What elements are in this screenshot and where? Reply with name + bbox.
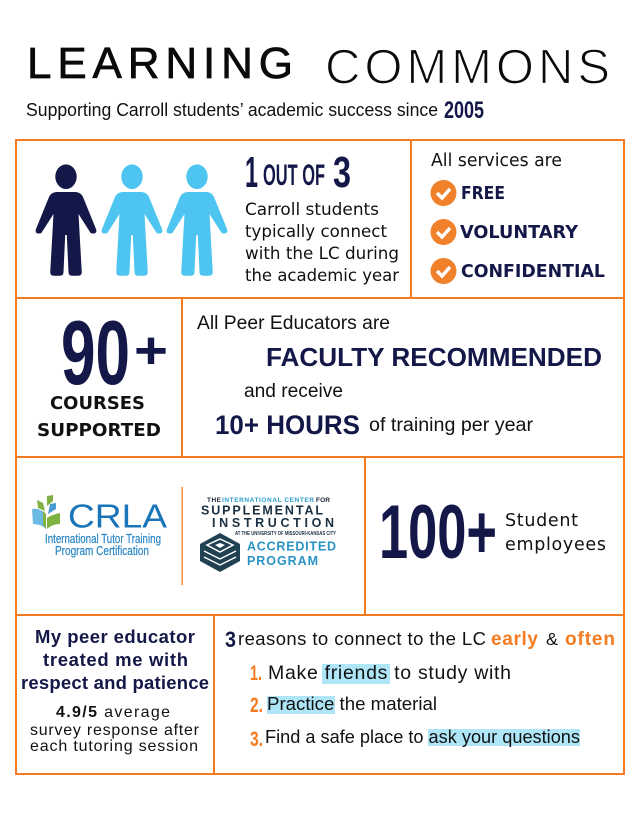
logo caption: international tutor training: International Tutor Training xyxy=(45,532,161,546)
title: COMMONS xyxy=(325,40,610,94)
logo wordmark: CRLA: CRLA xyxy=(68,498,167,534)
panel grid frame xyxy=(16,140,624,774)
icon: CRLA open book xyxy=(32,495,60,529)
heading: 3 reasons: 3 xyxy=(225,627,236,652)
panel: 1 out of 3 students xyxy=(36,148,399,286)
logo text: university line: AT THE UNIVERSITY OF MISSOURI-KANSAS CITY xyxy=(235,531,336,537)
panel: accreditation logos xyxy=(32,487,336,585)
quote: treated me with xyxy=(43,649,188,670)
logo text: accredited program: ACCREDITED xyxy=(247,540,336,554)
panel: peer educators xyxy=(197,313,602,440)
panel: three reasons xyxy=(225,627,615,751)
text: 10+ hours: 10+ HOURS xyxy=(215,410,360,440)
divider xyxy=(182,487,183,585)
stat: 100+: 100+ xyxy=(379,490,497,575)
logo text: supplemental instruction xyxy=(201,504,334,530)
text: faculty recommended: FACULTY RECOMMENDED xyxy=(266,342,602,372)
quote: respect and patience xyxy=(21,672,209,693)
stat: 1 out of 3: 3 xyxy=(333,148,351,197)
label: free: FREE xyxy=(461,183,505,204)
reason 3: 3. xyxy=(250,728,263,751)
panel: courses supported xyxy=(37,303,168,441)
text: all peer educators are: All Peer Educators are xyxy=(197,313,390,334)
text: connection description: the academic year xyxy=(245,266,399,286)
icon: stacked hexagon xyxy=(200,533,240,572)
subtitle: 2005 xyxy=(444,97,484,124)
heading: 3 reasons xyxy=(225,627,615,652)
quote: My peer educator xyxy=(35,626,195,647)
subtitle xyxy=(26,97,484,124)
title xyxy=(27,39,610,94)
icon: check confidential xyxy=(430,258,456,284)
label: courses supported: SUPPORTED xyxy=(37,420,161,441)
label: student employees: employees xyxy=(505,535,606,555)
logo text: supplemental instruction: INSTRUCTION xyxy=(212,516,334,530)
heading: all services are: All services are xyxy=(431,151,562,171)
reason 3: Find a safe place to ask your questions xyxy=(265,726,580,747)
label: student employees xyxy=(505,511,606,555)
label: courses supported xyxy=(37,393,161,441)
reason 2: Practice the material xyxy=(267,693,437,714)
label: courses supported: COURSES xyxy=(50,393,145,414)
stat: 1 out of 3 xyxy=(245,148,351,197)
logo text: international center: INTERNATIONAL CENTER xyxy=(222,497,314,504)
logo: supplemental instruction xyxy=(200,497,336,572)
survey statistic: 4.9/5 average xyxy=(56,704,170,721)
reason 2: 2. xyxy=(250,694,263,717)
reason 1: Make friends to study with xyxy=(268,662,511,684)
logo text: accredited program: PROGRAM xyxy=(247,554,318,568)
label: voluntary: VOLUNTARY xyxy=(460,222,579,243)
logo text: international center: THE xyxy=(207,497,222,504)
icon: dark person xyxy=(36,164,96,276)
panel: services xyxy=(430,151,605,284)
logo caption: international tutor training: Program Certification xyxy=(55,544,149,558)
survey statistic: each tutoring session xyxy=(30,738,198,755)
heading: 3 reasons: early xyxy=(491,629,538,650)
survey statistic xyxy=(30,704,200,755)
logo text: supplemental instruction: SUPPLEMENTAL xyxy=(201,504,323,518)
heading: 3 reasons: & xyxy=(546,629,558,649)
stat: 1 out of 3: 1 xyxy=(245,148,258,197)
subtitle: Supporting Carroll students’ academic success since xyxy=(26,100,438,120)
icon: check voluntary xyxy=(430,219,456,245)
heading: 3 reasons: reasons to connect to the LC xyxy=(238,628,486,649)
icon: light person two xyxy=(167,164,227,276)
icon: check free xyxy=(430,180,456,206)
survey statistic: survey response after xyxy=(30,722,200,739)
icon: light person one xyxy=(102,164,162,276)
logo caption: international tutor training xyxy=(45,532,161,558)
heading: 3 reasons: often xyxy=(565,629,615,650)
text: of training per year: of training per year xyxy=(369,415,534,436)
text: and receive: and receive xyxy=(244,381,343,402)
text: connection description: with the LC during xyxy=(245,244,399,264)
text: connection description xyxy=(245,200,399,286)
stat: 90+: 90 xyxy=(61,303,130,404)
panel: survey quote xyxy=(21,626,209,755)
label: student employees: Student xyxy=(505,511,578,531)
stat: 1 out of 3: OUT OF xyxy=(263,159,325,192)
logo text: international center: FOR xyxy=(316,497,330,504)
quote xyxy=(21,626,209,693)
text: connection description: Carroll students xyxy=(245,200,379,220)
label: confidential: CONFIDENTIAL xyxy=(461,261,605,282)
logo: CRLA xyxy=(32,495,167,558)
stat: 90+: + xyxy=(134,322,168,380)
reason 1: 1. xyxy=(250,662,262,685)
text: connection description: typically connect xyxy=(245,222,387,242)
logo text: accredited program xyxy=(247,540,336,568)
title: LEARNING xyxy=(27,39,293,88)
panel: student employees xyxy=(379,490,606,575)
